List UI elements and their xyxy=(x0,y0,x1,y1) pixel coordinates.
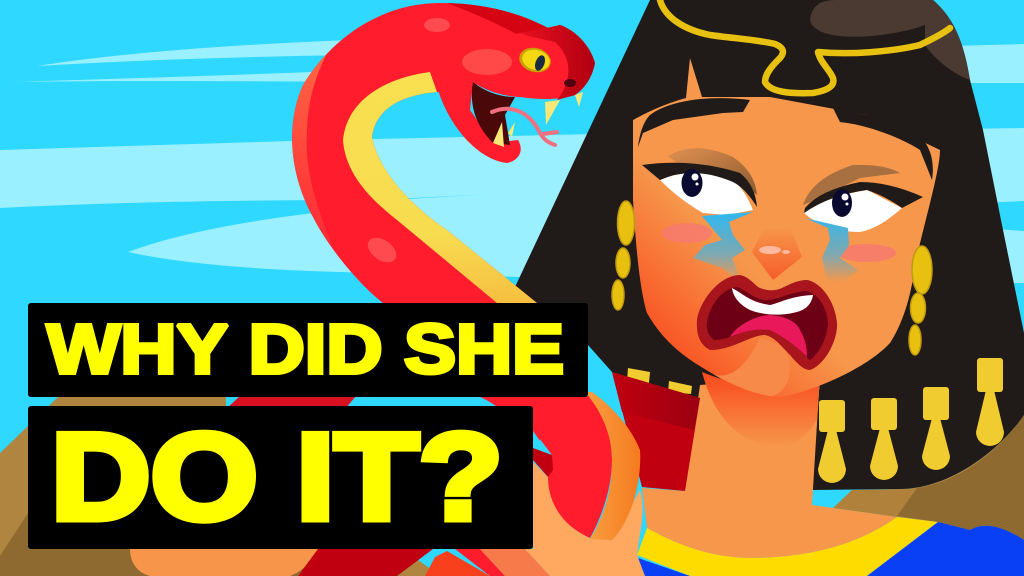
blue dress with gold collar xyxy=(637,517,1024,576)
hair beads xyxy=(818,358,1004,483)
red collar xyxy=(612,372,700,491)
caption: why did she: WHY DID SHE xyxy=(47,310,564,388)
tongue xyxy=(730,315,807,357)
snake eye xyxy=(516,44,554,76)
face xyxy=(633,58,940,397)
collar beads xyxy=(627,368,692,394)
mouth xyxy=(697,275,837,370)
right earring xyxy=(909,246,932,355)
caption: why did she xyxy=(28,303,588,397)
left earring xyxy=(612,201,634,310)
tears xyxy=(693,212,858,292)
cheek blush xyxy=(662,223,896,262)
sky streaks xyxy=(0,40,1024,283)
snake head xyxy=(432,25,595,163)
neck xyxy=(642,372,897,558)
caption: do it?: DO IT? xyxy=(51,409,503,546)
hair xyxy=(515,0,1024,490)
snake lower coil xyxy=(226,396,612,559)
arm and hand xyxy=(130,392,645,576)
nose xyxy=(752,227,802,280)
desert ground xyxy=(0,397,1024,576)
teeth xyxy=(732,288,813,315)
left eye xyxy=(642,148,757,215)
right eye xyxy=(803,165,923,232)
fringe xyxy=(638,98,933,180)
gold crown xyxy=(660,0,950,93)
snake body xyxy=(292,3,548,303)
